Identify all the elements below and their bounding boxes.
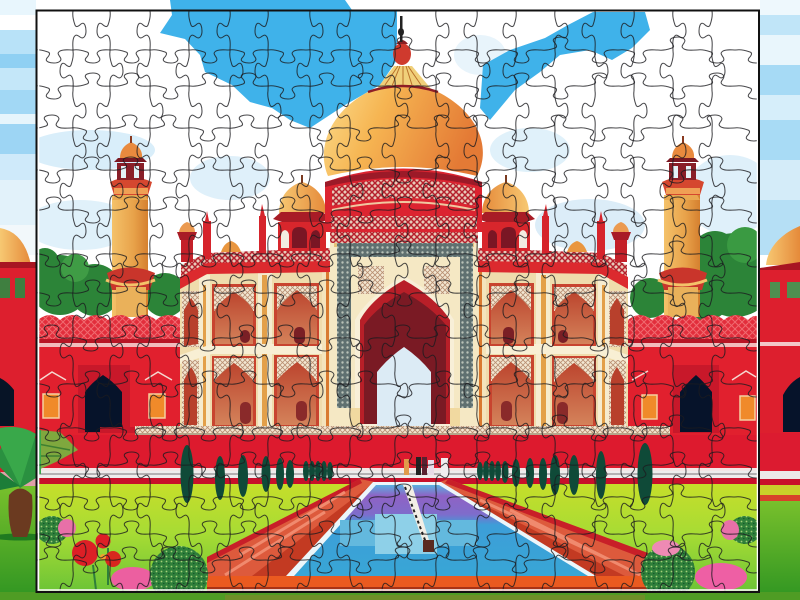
pink flowers left — [111, 567, 155, 591]
blue sky right patch — [480, 12, 650, 120]
pool bottom edge — [207, 576, 646, 591]
palm fronds inside frame — [38, 430, 78, 474]
parapet — [181, 248, 330, 277]
central arch — [355, 276, 454, 426]
right minaret — [658, 136, 707, 317]
left sky stripes — [0, 0, 36, 255]
tree left — [39, 248, 180, 317]
terrace balustrade — [100, 426, 670, 435]
lower side niche — [182, 360, 199, 428]
shrub right — [721, 516, 761, 544]
tree right — [630, 227, 757, 320]
lower red terrace wall — [38, 435, 758, 471]
side dome pavilion — [273, 175, 330, 251]
pink flowers right — [695, 563, 747, 591]
sky through arch — [377, 347, 431, 426]
right red wall — [628, 315, 760, 435]
cypress trees — [180, 443, 652, 505]
red flowers — [72, 534, 121, 590]
central iwan front — [330, 231, 478, 428]
dome finial — [368, 16, 438, 92]
right sky stripes — [760, 0, 800, 255]
lower niche 1 — [212, 356, 256, 426]
red cornice — [180, 261, 330, 289]
side bands and ground — [0, 432, 800, 600]
palm trunk — [0, 427, 48, 540]
upper side niche — [182, 291, 199, 347]
upper niche 1 — [212, 284, 256, 346]
upper niche 2 — [274, 283, 319, 346]
red spires — [203, 204, 266, 259]
body — [180, 262, 340, 430]
storey ledge — [180, 344, 322, 364]
bottom ground strip — [0, 592, 800, 600]
spandrel panels — [358, 266, 384, 294]
pool base shadow — [207, 587, 647, 591]
reflecting pool — [286, 482, 596, 576]
right strip: dome tower — [760, 226, 800, 435]
main dome — [324, 87, 483, 176]
columns — [199, 262, 332, 430]
gray inlay frame — [337, 243, 473, 408]
shrub left small — [36, 516, 76, 544]
sky and clouds — [39, 35, 757, 251]
white stripes — [38, 468, 758, 484]
walkway left — [207, 479, 375, 590]
round bush left — [150, 546, 208, 600]
lawn — [38, 484, 758, 592]
drum — [325, 168, 482, 232]
left strip: dome tower — [0, 228, 36, 438]
lower niche 2 — [274, 355, 319, 426]
base plinth — [350, 408, 360, 426]
left minaret — [106, 136, 155, 317]
people — [404, 457, 448, 475]
round bush right — [641, 540, 695, 599]
lattice band — [330, 231, 478, 243]
left red wall — [38, 315, 182, 435]
blue sky left patch — [160, 0, 397, 128]
small far pavilion — [177, 222, 197, 262]
small low dome — [221, 241, 241, 252]
building right half — [468, 175, 631, 430]
walkway right — [440, 479, 648, 590]
building left half — [177, 175, 340, 430]
